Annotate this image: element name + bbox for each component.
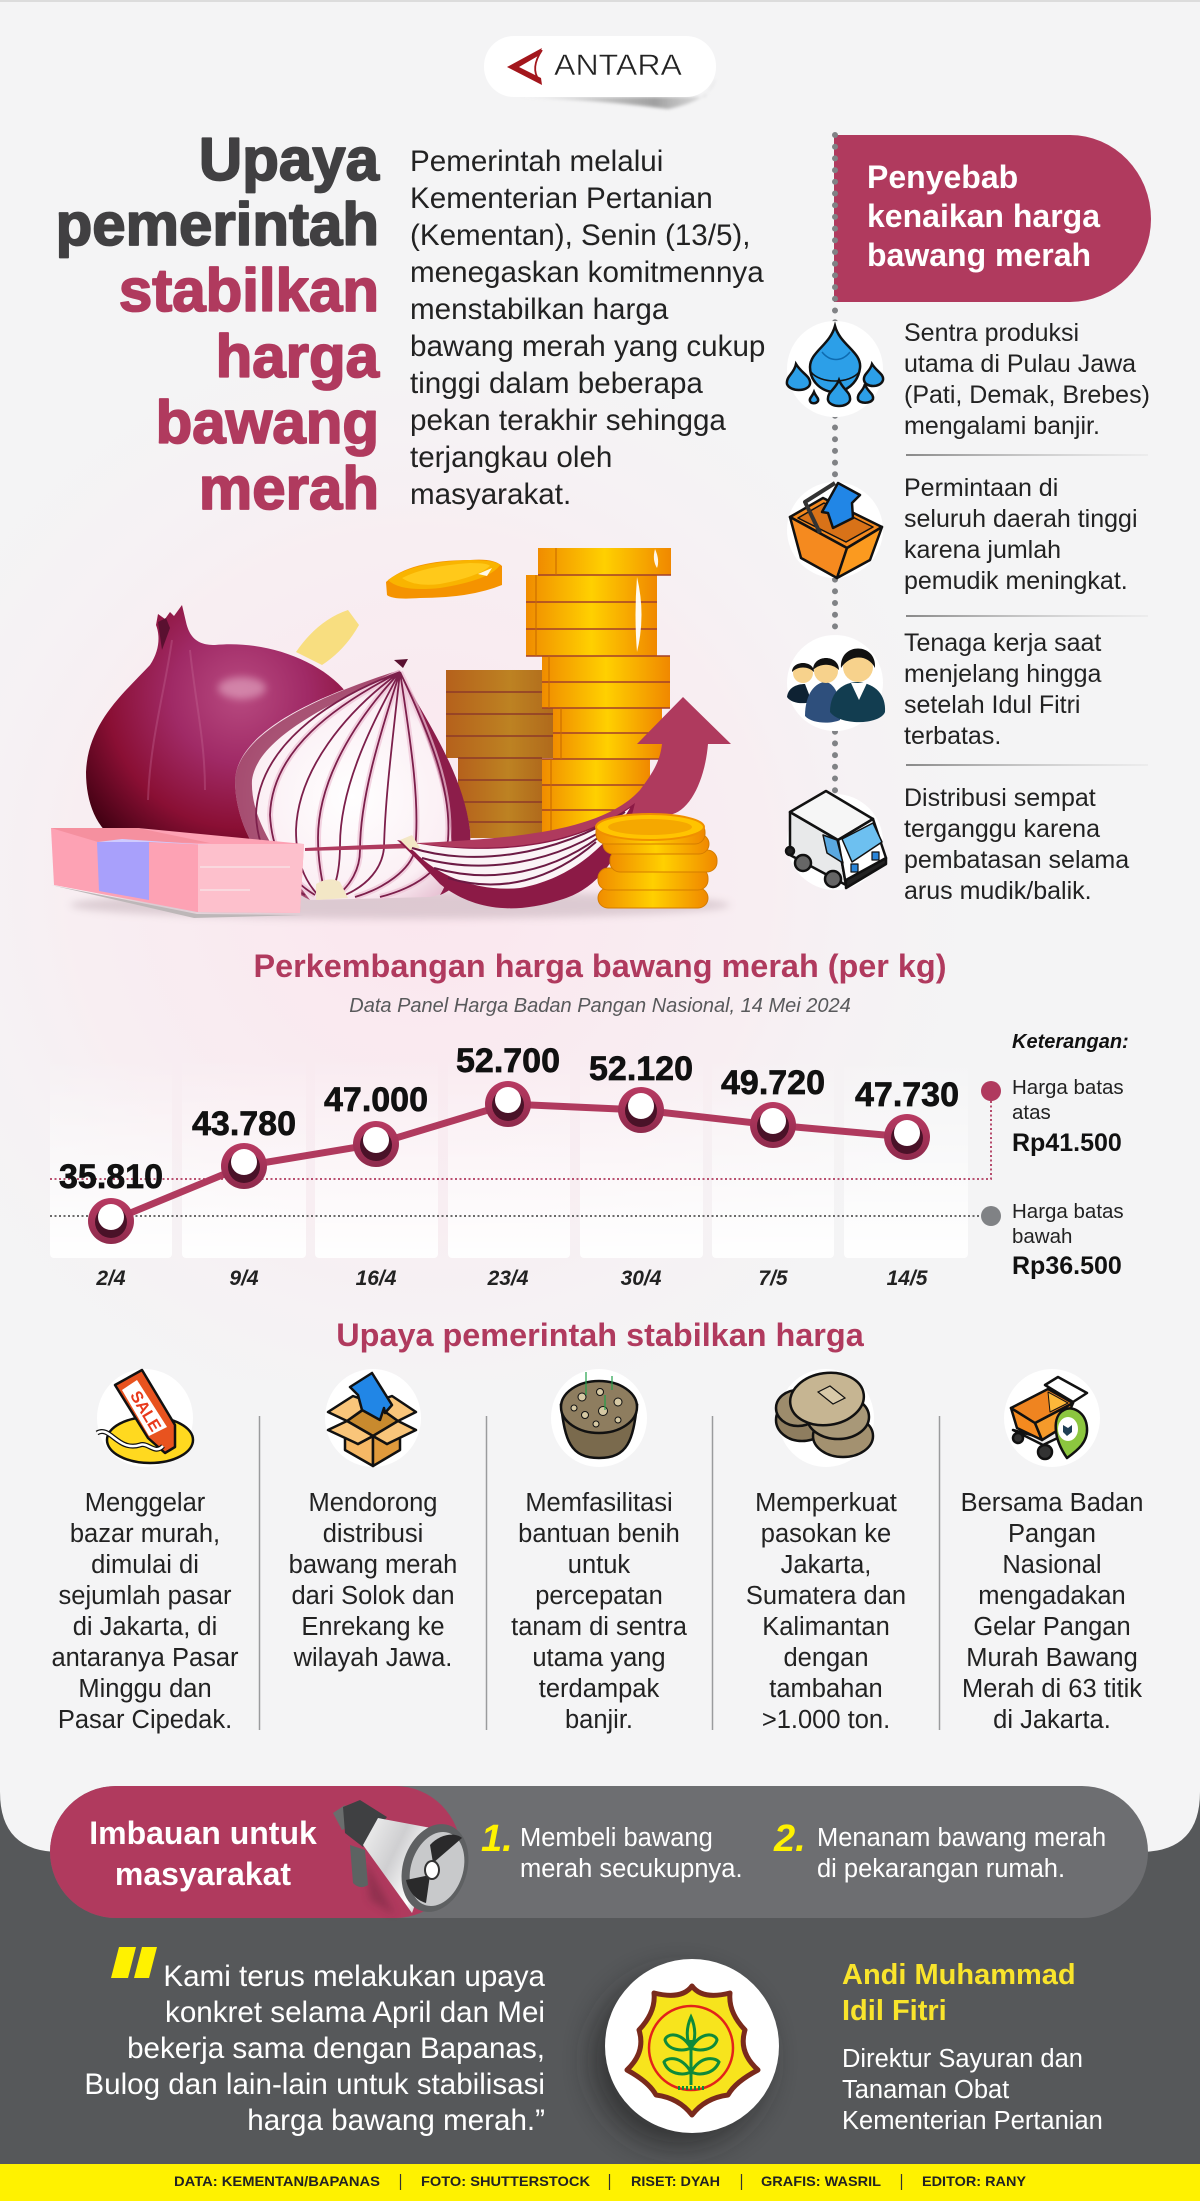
line chart: price per kg: 47.000 [324, 1081, 428, 1119]
floating coin [386, 560, 502, 599]
advice heading: Imbauan untuk [89, 1815, 317, 1851]
advice item 2: Menanam bawang merah [817, 1824, 1106, 1852]
title: bawang [156, 389, 379, 456]
line chart: price per kg: 16/4 [356, 1267, 397, 1290]
rising arrow [305, 697, 731, 860]
advice item 1: Membeli bawang [520, 1824, 713, 1852]
chart heading: Perkembangan harga bawang merah (per kg) [254, 948, 946, 984]
panel: causes heading: Penyebab [867, 159, 1018, 195]
speaker title: Kementerian Pertanian [842, 2107, 1103, 2135]
intro text block: menegaskan komitmennya [410, 256, 764, 289]
advice heading: masyarakat [115, 1856, 291, 1892]
cause text: distribution: terganggu karena [904, 815, 1100, 843]
effort text: food event: Merah di 63 titik [962, 1675, 1142, 1703]
footer credits bar: RISET: DYAH [631, 2173, 720, 2189]
advice item 1: merah secukupnya. [520, 1855, 743, 1883]
panel: causes heading [834, 135, 1151, 302]
cause text: flood: utama di Pulau Jawa [904, 350, 1136, 378]
column dividers [260, 1416, 940, 1730]
advice item 2: di pekarangan rumah. [817, 1855, 1065, 1883]
cause text: labour: setelah Idul Fitri [904, 691, 1080, 719]
quote text: Bulog dan lain-lain untuk stabilisasi [84, 2068, 545, 2101]
intro text block [410, 145, 765, 511]
intro text block: pekan terakhir sehingga [410, 404, 726, 437]
footer credits bar: DATA: KEMENTAN/BAPANAS [174, 2173, 380, 2189]
footer credits bar: GRAFIS: WASRIL [761, 2173, 881, 2189]
effort text: distribution: wilayah Jawa. [293, 1644, 452, 1672]
icon: bowl of seeds [551, 1369, 647, 1467]
quote text: konkret selama April dan Mei [165, 1996, 545, 2029]
effort text: bazaar: Pasar Cipedak. [58, 1706, 232, 1734]
speaker name: Idil Fitri [842, 1995, 947, 2027]
quote text: Kami terus melakukan upaya [163, 1960, 546, 1993]
title: harga [216, 323, 380, 390]
effort text: bazaar: Menggelar [85, 1489, 206, 1517]
line chart: price per kg: 43.780 [192, 1105, 296, 1143]
line chart: price per kg: 30/4 [621, 1267, 662, 1290]
small coin stack [596, 814, 717, 908]
speaker title [842, 2045, 1103, 2135]
effort text: food event: Bersama Badan [961, 1489, 1143, 1517]
bank note bundle [51, 828, 304, 918]
effort text: food event: Gelar Pangan [973, 1613, 1131, 1641]
footer credits bar [0, 2164, 1200, 2201]
effort text: seed aid: tanam di sentra [511, 1613, 688, 1641]
panel: causes heading: bawang merah [867, 237, 1091, 273]
quote text [84, 1960, 546, 2137]
effort text: supply: Jakarta, [781, 1551, 871, 1579]
effort text: food event: Murah Bawang [966, 1644, 1138, 1672]
chart legend: Rp36.500 [1012, 1252, 1122, 1280]
chart legend: atas [1012, 1101, 1051, 1124]
chart legend [981, 1031, 1129, 1280]
cause text: demand: Permintaan di [904, 474, 1058, 502]
brown coin stack [446, 670, 553, 838]
line chart: price per kg: 7/5 [758, 1267, 788, 1290]
line chart: price per kg: 9/4 [229, 1267, 259, 1290]
cut onion [235, 659, 470, 900]
effort text: distribution: dari Solok dan [291, 1582, 455, 1610]
effort text: distribution: Enrekang ke [301, 1613, 445, 1641]
effort text: distribution [289, 1489, 457, 1672]
emblem: Kementerian Pertanian [592, 1959, 779, 2148]
effort text: supply: Sumatera dan [746, 1582, 906, 1610]
cause text: demand: karena jumlah [904, 536, 1061, 564]
icon: people [787, 635, 885, 731]
effort text: supply: Kalimantan [762, 1613, 890, 1641]
effort text: seed aid: percepatan [535, 1582, 663, 1610]
section heading: government efforts: Upaya pemerintah stabilkan harga [336, 1317, 865, 1353]
illustration: onions, coins, money and rising arrow [51, 548, 731, 919]
cause text: flood: mengalami banjir. [904, 412, 1100, 440]
cause text: distribution: arus mudik/balik. [904, 877, 1092, 905]
speaker title: Tanaman Obat [842, 2076, 1009, 2104]
intro text block: Pemerintah melalui [410, 145, 663, 178]
effort text: food event [961, 1489, 1143, 1734]
effort text: food event: di Jakarta. [993, 1706, 1111, 1734]
advice item 2 [773, 1818, 1106, 1883]
icon: sacks [776, 1368, 874, 1467]
intro text block: (Kementan), Senin (13/5), [410, 219, 751, 252]
title: pemerintah [56, 191, 379, 258]
intro text block: bawang merah yang cukup [410, 330, 765, 363]
effort text: supply [746, 1489, 906, 1734]
yellow petal [296, 610, 359, 665]
dotted timeline [832, 135, 838, 800]
effort text: supply: pasokan ke [761, 1520, 891, 1548]
cause text: distribution [904, 784, 1129, 905]
effort text: seed aid: Memfasilitasi [525, 1489, 673, 1517]
effort text: distribution: distribusi [323, 1520, 423, 1548]
cause text: demand: pemudik meningkat. [904, 567, 1128, 595]
cause text: flood [904, 319, 1150, 440]
line chart: price per kg: 2/4 [95, 1267, 126, 1290]
effort text: food event: Pangan [1008, 1520, 1096, 1548]
advice heading [89, 1815, 317, 1892]
quote text: bekerja sama dengan Bapanas, [127, 2032, 545, 2065]
panel: causes heading: kenaikan harga [867, 198, 1100, 234]
cause text: labour: terbatas. [904, 722, 1001, 750]
gold coin stack [526, 548, 671, 839]
line chart: price per kg: 14/5 [887, 1267, 928, 1290]
whole onion [86, 605, 346, 860]
effort text: bazaar: dimulai di [91, 1551, 199, 1579]
effort text: bazaar: Minggu dan [78, 1675, 212, 1703]
icon: van [786, 791, 886, 890]
effort text: seed aid: terdampak [539, 1675, 659, 1703]
logo: ANTARA [484, 36, 716, 109]
effort text: distribution: Mendorong [308, 1489, 438, 1517]
title: merah [199, 455, 379, 522]
title [56, 126, 380, 522]
line chart: price per kg: 35.810 [59, 1158, 163, 1196]
intro text block: terjangkau oleh [410, 441, 612, 474]
advice item 2: 2. [773, 1818, 806, 1860]
cause text: distribution: pembatasan selama [904, 846, 1129, 874]
effort text: bazaar [51, 1489, 239, 1734]
speaker name: Andi Muhammad [842, 1959, 1076, 1991]
chart legend: Harga batas [1012, 1076, 1124, 1099]
cause text: labour: Tenaga kerja saat [904, 629, 1101, 657]
chart source: Data Panel Harga Badan Pangan Nasional, 14 Mei 2024 [349, 995, 851, 1017]
icon: sale tag: SALE [126, 1388, 164, 1435]
line chart: price per kg: 52.700 [456, 1042, 560, 1080]
chart legend: Rp41.500 [1012, 1129, 1122, 1157]
cause text: demand: seluruh daerah tinggi [904, 505, 1138, 533]
quote mark [111, 1947, 157, 1978]
effort text: seed aid: utama yang [532, 1644, 666, 1672]
effort text: supply: tambahan [769, 1675, 883, 1703]
advice item 1: 1. [481, 1818, 513, 1860]
chart legend: bawah [1012, 1225, 1072, 1248]
icon: cart and location pin [1004, 1369, 1100, 1467]
effort text: supply: dengan [783, 1644, 869, 1672]
cause text: flood: Sentra produksi [904, 319, 1079, 347]
effort text: bazaar: sejumlah pasar [59, 1582, 232, 1610]
onion slice [397, 803, 635, 908]
speaker name [842, 1959, 1076, 2027]
effort text: food event: mengadakan [978, 1582, 1126, 1610]
title: Upaya [199, 126, 380, 193]
cause text: flood: (Pati, Demak, Brebes) [904, 381, 1150, 409]
icon: megaphone [333, 1800, 479, 1921]
cause text: distribution: Distribusi sempat [904, 784, 1096, 812]
speaker title: Direktur Sayuran dan [842, 2045, 1083, 2073]
intro text block: tinggi dalam beberapa [410, 367, 703, 400]
quote text: harga bawang merah.” [247, 2104, 545, 2137]
effort text: seed aid: bantuan benih [518, 1520, 680, 1548]
intro text block: menstabilkan harga [410, 293, 669, 326]
line chart: price per kg: 47.730 [855, 1076, 959, 1114]
effort text: bazaar: antaranya Pasar [51, 1644, 239, 1672]
icon: box with arrow [325, 1369, 421, 1467]
line chart: price per kg [50, 1042, 991, 1290]
logo: ANTARA: ANTARA [554, 49, 682, 82]
panel: causes list [786, 319, 1150, 905]
cause text: demand [904, 474, 1138, 595]
effort text: bazaar: bazar murah, [70, 1520, 220, 1548]
effort text: seed aid: banjir. [565, 1706, 633, 1734]
effort text: supply: Memperkuat [755, 1489, 897, 1517]
effort text: supply: >1.000 ton. [762, 1706, 890, 1734]
effort text: food event: Nasional [1002, 1551, 1102, 1579]
cause text: labour: menjelang hingga [904, 660, 1101, 688]
effort text: distribution: bawang merah [289, 1551, 457, 1579]
chart legend: Keterangan: [1012, 1031, 1129, 1053]
footer credits bar: EDITOR: RANY [922, 2173, 1027, 2189]
icon: sale tag [97, 1369, 193, 1467]
chart legend: Harga batas [1012, 1200, 1124, 1223]
line chart: price per kg: 52.120 [589, 1050, 693, 1088]
icon: basket [787, 482, 883, 578]
advice item 1 [481, 1818, 743, 1883]
effort text: seed aid: untuk [568, 1551, 630, 1579]
effort text: bazaar: di Jakarta, di [73, 1613, 217, 1641]
effort text: seed aid [511, 1489, 688, 1734]
panel: government efforts [51, 1368, 1143, 1734]
panel: public advice [50, 1786, 1148, 1921]
line chart: price per kg: 49.720 [721, 1064, 825, 1102]
line chart: price per kg: 23/4 [487, 1267, 529, 1290]
title: stabilkan [119, 257, 379, 324]
icon: water drops [787, 321, 883, 417]
cause text: labour [904, 629, 1101, 750]
intro text block: masyarakat. [410, 478, 571, 511]
intro text block: Kementerian Pertanian [410, 182, 713, 215]
footer credits bar: FOTO: SHUTTERSTOCK [421, 2173, 590, 2189]
